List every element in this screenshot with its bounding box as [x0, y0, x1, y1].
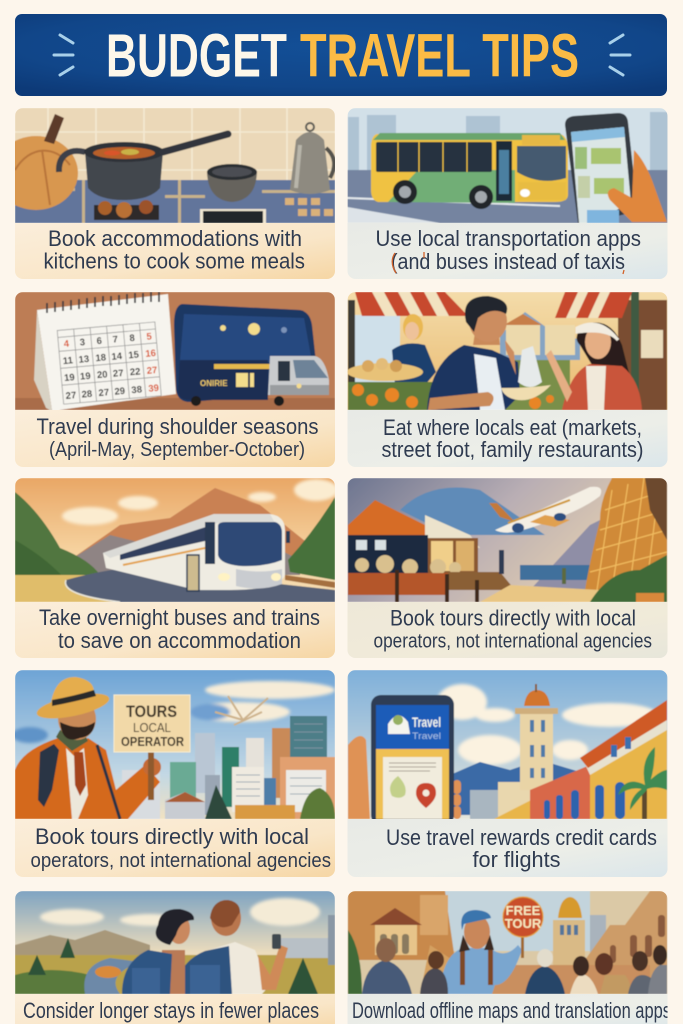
icon: calendar: 19 — [64, 372, 75, 384]
caption: tour operators: Book tours directly with local — [390, 606, 636, 630]
icon: travel app phone — [371, 695, 454, 825]
caption: local operator guide: Book tours directly with local — [35, 824, 309, 849]
figure: tour guide — [440, 910, 522, 994]
icon: tours sign — [114, 695, 190, 800]
illustration: couple looking at landscape — [15, 891, 335, 994]
illustration: lodge, plane and cliff — [348, 478, 668, 602]
icon: left sparkle lines — [54, 35, 73, 75]
icon: burner with food — [94, 200, 159, 220]
caption: local transport: (and buses instead of taxis — [391, 249, 625, 274]
caption: eat with locals: Eat where locals eat (markets, — [383, 415, 642, 440]
panel: longer stays — [15, 891, 335, 1024]
icon: plane — [489, 487, 601, 533]
icon: distant mountains — [15, 930, 150, 960]
icon: calendar: 38 — [131, 384, 142, 396]
icon: phone with hand — [565, 113, 667, 223]
caption: shoulder seasons: Travel during shoulder seasons — [36, 414, 318, 439]
caption: overnight buses: Take overnight buses and trains — [39, 605, 320, 630]
icon: free tour sign: TOUR — [505, 916, 542, 931]
icon: left awning — [348, 292, 466, 383]
icon: town buildings — [470, 684, 558, 819]
icon: tours sign: OPERATOR — [121, 734, 185, 749]
caption: local transport: Use local transportation apps — [376, 226, 641, 251]
panel: rewards cards — [348, 670, 668, 877]
caption: rewards cards: for flights — [472, 847, 560, 872]
icon: coach bus — [103, 514, 290, 591]
icon: clouds — [40, 898, 320, 926]
caption: kitchens: kitchens to cook some meals — [44, 248, 305, 274]
icon: colorful facade — [494, 700, 667, 819]
caption: shoulder seasons: (April-May, September-October) — [49, 439, 305, 461]
icon: plastic bag — [518, 346, 542, 387]
icon: calendar: 11 — [62, 355, 74, 367]
illustration: calendar and bus — [15, 292, 335, 411]
icon: small truck — [268, 356, 329, 406]
icon: calendar — [34, 292, 176, 411]
icon: calendar: 4 — [63, 338, 70, 350]
icon: crowd — [362, 938, 667, 994]
caption: eat with locals — [348, 410, 668, 467]
icon: calendar: 27 — [65, 390, 77, 402]
icon: hand — [348, 736, 461, 819]
icon: clouds — [12, 681, 335, 743]
icon: birds — [215, 696, 268, 725]
illustration: guide and skyline — [12, 670, 335, 819]
icon: calendar: 39 — [148, 383, 159, 395]
illustration: food market — [347, 292, 668, 410]
icon: calendar: 3 — [79, 337, 86, 349]
panel: shoulder seasons — [15, 292, 335, 467]
figure: man eating — [427, 296, 551, 410]
icon: domed tower — [553, 897, 606, 975]
illustration: phone and colonial town — [348, 670, 668, 825]
icon: calendar: 7 — [112, 334, 118, 346]
icon: flowers — [348, 382, 554, 410]
icon: right awning and building — [555, 292, 667, 410]
figure: man — [181, 900, 288, 994]
caption: overnight buses: to save on accommodation — [58, 628, 301, 653]
icon: calendar: 27 — [98, 387, 110, 399]
figure: tour guide — [15, 677, 161, 819]
caption: local transport — [348, 223, 668, 279]
icon: tours sign: TOURS — [126, 702, 177, 721]
icon: left building — [348, 891, 460, 994]
caption: local operator guide: operators, not international agencies — [30, 850, 331, 872]
icon: free tour sign — [503, 897, 543, 958]
panel: local operator guide — [12, 670, 335, 877]
caption: shoulder seasons — [15, 410, 335, 467]
icon: calendar: 5 — [146, 331, 153, 343]
icon: calendar: 6 — [96, 336, 102, 347]
icon: skyline — [122, 716, 335, 819]
icon: calendar: 22 — [129, 366, 141, 378]
illustration: bus and phone — [348, 108, 668, 223]
panel: local transport — [348, 108, 668, 279]
icon: hotplate — [200, 209, 266, 223]
caption: longer stays: Consider longer stays in fewer places — [23, 998, 319, 1023]
panel: eat with locals — [347, 292, 668, 467]
icon: calendar: 18 — [95, 352, 107, 364]
icon: calendar: 14 — [111, 351, 123, 363]
icon: calendar: 13 — [78, 354, 90, 366]
icon: green hills — [15, 492, 335, 585]
caption: tour operators — [348, 602, 668, 658]
icon: clouds — [62, 479, 338, 525]
panel: offline maps — [348, 891, 671, 1024]
icon: waffle cliff — [585, 478, 667, 590]
icon: kettle — [290, 123, 334, 194]
caption: kitchens — [15, 223, 335, 279]
icon: lodge — [348, 500, 515, 602]
icon: bowl — [207, 164, 257, 202]
icon: travel app phone: Travel — [412, 714, 441, 730]
icon: calendar: 27 — [112, 368, 124, 380]
figure: woman — [546, 322, 642, 410]
icon: right building — [585, 891, 667, 994]
icon: night bus: ONIRIE — [200, 379, 228, 388]
panel: kitchens — [0, 108, 335, 279]
icon: road — [15, 568, 335, 602]
icon: calendar: 8 — [129, 333, 135, 344]
icon: bus — [371, 133, 568, 209]
illustration: free walking tour — [348, 891, 668, 994]
icon: travel app phone: Travel — [412, 731, 441, 741]
icon: pot — [59, 134, 228, 200]
icon: calendar: 27 — [146, 365, 158, 377]
icon: tours sign: LOCAL — [133, 720, 171, 735]
icon: calendar: 16 — [145, 348, 156, 360]
icon: trees — [28, 938, 318, 994]
icon: calendar: 29 — [114, 386, 126, 398]
icon: calendar: 28 — [81, 389, 93, 401]
illustration: bus on mountain road — [15, 478, 338, 602]
icon: food stall — [347, 358, 423, 381]
icon: mountains — [450, 760, 590, 815]
icon: wooden board — [15, 114, 78, 211]
caption: eat with locals: street foot, family restaurants) — [382, 437, 644, 462]
icon: calendar: 15 — [128, 349, 140, 361]
title: BUDGET — [106, 22, 287, 90]
icon: night bus — [174, 304, 316, 406]
icon: river with boat — [84, 958, 140, 994]
icon: clouds — [437, 684, 658, 765]
icon: calendar: 20 — [97, 369, 108, 381]
panel: tour operators — [348, 478, 668, 658]
icon: palm — [618, 747, 667, 819]
caption: overnight buses — [15, 602, 335, 658]
icon: mountains — [70, 488, 310, 575]
illustration: kitchen stove — [0, 108, 335, 223]
title: TRAVEL TIPS — [300, 22, 579, 90]
icon: free tour sign: FREE — [506, 903, 541, 918]
caption: rewards cards: Use travel rewards credit cards — [386, 825, 657, 850]
header banner — [15, 14, 667, 96]
caption: local operator guide — [15, 819, 335, 877]
icon: calendar: 19 — [80, 371, 91, 383]
icon: far building — [280, 915, 335, 965]
icon: right sparkle lines — [610, 35, 630, 75]
icon: market vendor — [392, 314, 436, 385]
icon: coastal path and greenery — [480, 550, 667, 602]
caption: rewards cards — [348, 819, 668, 877]
icon: fields — [15, 955, 335, 994]
panel: overnight buses — [15, 478, 338, 658]
figure: woman — [122, 909, 194, 994]
caption: kitchens: Book accommodations with — [48, 226, 302, 251]
